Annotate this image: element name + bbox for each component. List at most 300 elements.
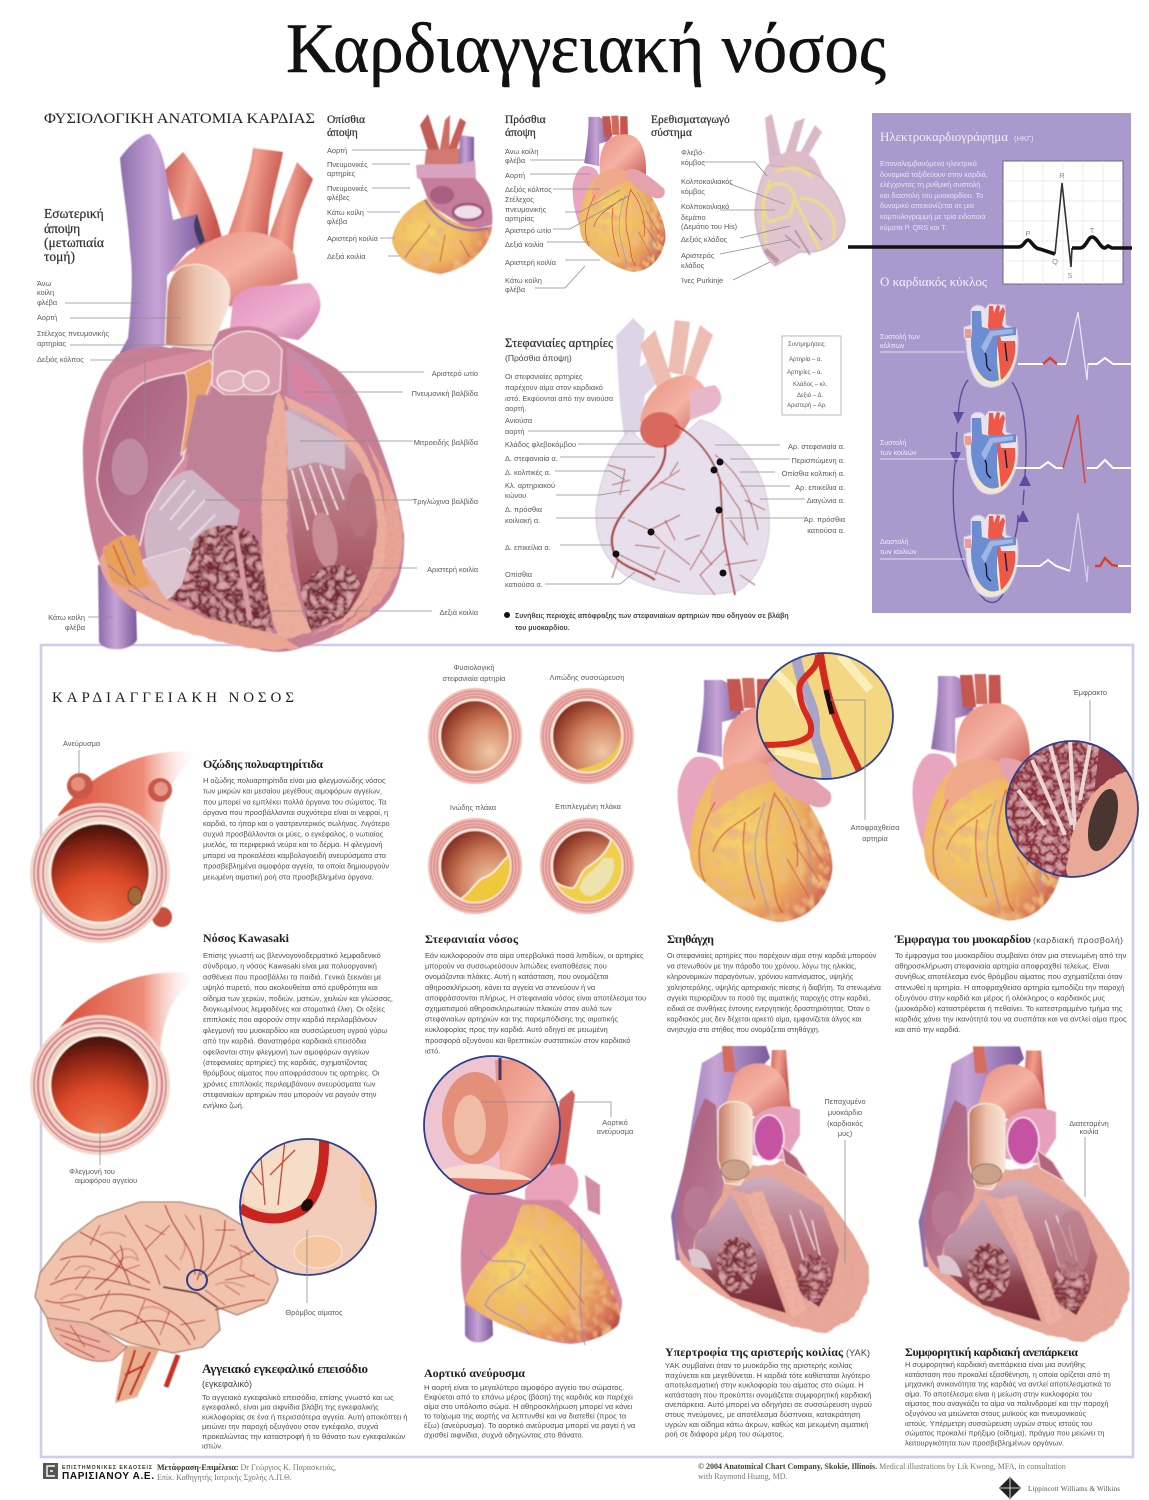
labels: posterior view: Αριστερή κοιλία xyxy=(327,234,379,243)
labels: posterior view: φλέβες xyxy=(327,193,350,202)
labels: conduction system: κόμβος xyxy=(681,187,705,196)
text: polyarteritis nodosa: μειωμένη αιματική ροή στα προσβεβλημένα όργανα. xyxy=(203,872,374,881)
illustration: artery complicated plaque xyxy=(540,818,634,914)
labels: internal view: Αριστερή κοιλία xyxy=(427,565,479,574)
labels: coronary arteries: ιστό. Εκφύονται από την ανιούσα xyxy=(505,394,614,403)
text: Kawasaki disease: στεφανιαίων αρτηριών που μπορούν να ραγούν στην xyxy=(203,1090,377,1099)
text: polyarteritis nodosa: συχνά προσβάλλονται οι μύες, ο εγκέφαλος, ο νωτιαίος xyxy=(203,830,384,838)
labels: internal view: φλέβα xyxy=(37,298,58,307)
labels: internal view: φλέβα xyxy=(65,623,86,632)
text: coronary disease: αθηροσκλήρωση, κάνει τα αγγεία να στενεύουν ή να xyxy=(425,983,596,992)
panel: cardiovascular disease frame xyxy=(41,645,1133,1457)
footnote: του μυοκαρδίου. xyxy=(515,625,570,632)
labels: internal view: Άνω xyxy=(37,279,51,288)
labels: coronary arteries: Διαγώνια α. xyxy=(807,496,845,505)
chart: ECG trace on grid: Q xyxy=(1052,257,1058,266)
text: left ventricular hypertrophy: ανεπάρκεια. Αυτό μπορεί να οδηγήσει σε συσσώρευση υγρού xyxy=(665,1400,872,1409)
labels: artery stages: στεφανιαία αρτηρία xyxy=(443,674,506,683)
text: angina: κληρονομικών παραγόντων, χρόνιου καπνίσματος, υψηλής xyxy=(667,973,854,981)
labels: artery stages xyxy=(443,663,624,812)
text: congestive heart failure: αίμα. Το αποτέλεσμα είναι η μείωση στην κυκλοφορία του xyxy=(905,1389,1092,1398)
labels: internal view: Στέλεχος πνευμονικής xyxy=(37,329,109,338)
labels: anterior view xyxy=(505,147,630,294)
label: aneurysm xyxy=(63,739,101,775)
label: thickened myocardium: μυς) xyxy=(838,1129,852,1138)
labels: anterior view: φλέβα xyxy=(505,156,526,165)
text: Kawasaki disease: θρόμβους αίματος που αποφράσσουν τις αρτηρίες. Οι xyxy=(203,1069,380,1078)
labels: coronary arteries: αορτή. xyxy=(505,404,527,413)
text: stroke: Αγγειακό εγκεφαλικό επεισόδιο xyxy=(202,1361,368,1376)
text: stroke: μειώνει την παροχή οξυγόνου στον εγκέφαλο, συχνά xyxy=(202,1422,379,1431)
legend: abbreviations: Δεξιά – Δ. xyxy=(797,392,824,399)
labels: anterior view: Αορτή xyxy=(505,171,525,180)
labels: coronary arteries: Δ. επικείλια α. xyxy=(505,543,551,552)
text: left ventricular hypertrophy: Υπερτροφία της αριστερής κοιλίας xyxy=(665,1345,844,1359)
labels: coronary arteries: παρέχουν αίμα στον καρδιακό xyxy=(505,383,603,392)
text: angina: καρδιακός μυς δεν δέχεται αρκετό αίμα, εμφανίζεται άλγος και xyxy=(667,1016,862,1024)
text: ECG description: κύματα P, QRS και T. xyxy=(880,223,947,232)
illustration: thrombus magnifier xyxy=(240,1135,384,1275)
text: angina: Οι στεφανιαίες αρτηρίες που παρέχουν αίμα στην καρδιά μπορούν xyxy=(667,952,877,960)
panel: normal heart anatomy heading: ΦΥΣΙΟΛΟΓΙΚΗ ΑΝΑΤΟΜΙΑ ΚΑΡΔΙΑΣ xyxy=(44,111,315,127)
labels: cycle stages xyxy=(880,334,965,559)
labels: coronary arteries: Δ. πρόσθια xyxy=(505,505,543,514)
labels: conduction system xyxy=(680,148,790,285)
credits: translation: Επίκ. Καθηγητής Ιατρικής Σχολής Α.Π.Θ. xyxy=(157,1473,292,1482)
text: ECG description: δυναμικό απεικονίζεται σε μια xyxy=(880,201,974,210)
illustration: artery fatty buildup xyxy=(540,688,634,784)
labels: internal view: Μιτροειδής βαλβίδα xyxy=(414,438,479,447)
icon: ventricular systole heart xyxy=(964,411,1018,494)
text: myocardial infarction: καρδιάς χάνει την ικανότητά του να συσπάται και να αντλεί αίμα προς xyxy=(895,1015,1127,1024)
label: thickened myocardium: μυοκάρδιο xyxy=(828,1108,862,1117)
chart: ECG trace on grid xyxy=(848,161,1132,284)
labels: coronary arteries: Αρ. πρόσθια xyxy=(804,515,846,524)
text: coronary disease: προσφορά οξυγόνου και θρεπτικών συστατικών στον καρδιακό xyxy=(425,1036,631,1045)
panel: ECG and cardiac cycle xyxy=(848,113,1132,613)
panel: anterior view xyxy=(505,114,665,294)
label: aortic aneurysm xyxy=(481,1102,634,1136)
text: angina: ειδικά σε συνθήκες έντονης ενεργητικής δραστηριότητας. Όταν ο xyxy=(667,1005,870,1013)
labels: cycle stages: Διαστολή xyxy=(880,539,909,546)
chart: ECG trace on grid: S xyxy=(1067,271,1073,280)
panel: anterior view: άποψη xyxy=(505,127,536,139)
illustration: artery fibrous plaque xyxy=(428,818,522,914)
text: ECG description: ελέγχοντας τη ρυθμική συστολή xyxy=(880,180,980,189)
text: coronary disease: αποφράσσονται πλήρως. Η στεφανιαία νόσος είναι αποτέλεσμα του xyxy=(425,993,646,1002)
label: infarct xyxy=(1072,688,1107,741)
title: Καρδιαγγειακή νόσος xyxy=(286,10,886,88)
labels: coronary arteries: Περισπώμενη α. xyxy=(791,456,845,465)
illustration: infarction heart xyxy=(913,674,1061,920)
panel: anterior view: Πρόσθια xyxy=(505,114,546,126)
illustration: coronary heart xyxy=(596,318,769,595)
illustration: main cutaway heart xyxy=(83,134,404,652)
text: ECG description: Επαναλαμβανόμενα ηλεκτρικά xyxy=(880,159,977,168)
text: coronary disease: στεφανιαίων αρτηριών και της παρεμπόδισης της αιματικής xyxy=(425,1015,618,1024)
text: polyarteritis nodosa: Οζώδης πολυαρτηρίτιδα xyxy=(203,757,323,771)
labels: anterior view: Άνω κοίλη xyxy=(505,147,538,156)
labels: internal view: τομή) xyxy=(44,249,75,264)
text: congestive heart failure: Συμφορητική καρδιακή ανεπάρκεια xyxy=(905,1345,1078,1359)
labels: artery stages: Λιπώδης συσσώρευση xyxy=(550,673,624,682)
illustration: conduction heart xyxy=(755,114,845,266)
labels: internal view: αρτηρίας xyxy=(37,339,67,348)
text: Kawasaki disease: από την καρδιά. Θανατηφόρα καρδιακά επεισόδια xyxy=(203,1037,367,1046)
text: Kawasaki disease: χρόνιες επιπλοκές περιλαμβάνουν ανευρύσματα των xyxy=(203,1079,376,1088)
heading: ECG: Ηλεκτροκαρδιογράφημα xyxy=(880,129,1008,144)
illustration: artery normal xyxy=(428,688,522,784)
legend: abbreviations: Αρτηρία – α. xyxy=(789,357,822,363)
text: myocardial infarction: συνήθως αποτέλεσμα ενός θρόμβου αίματος που σχηματίζεται όταν xyxy=(895,972,1123,981)
labels: coronary arteries: Κλ. αρτηριακού xyxy=(505,481,555,490)
panel: conduction system xyxy=(651,114,845,285)
labels: artery stages: Φυσιολογική xyxy=(454,663,494,672)
text: Kawasaki disease: οφείλονται στην φλεγμονή των αιμοφόρων αγγείων xyxy=(203,1047,370,1056)
illustration: angina heart xyxy=(678,678,832,922)
labels: anterior view: Δεξιά κοιλία xyxy=(505,240,544,249)
labels: anterior view: Στέλεχος xyxy=(505,195,534,204)
text: myocardial infarction xyxy=(894,932,1127,1034)
labels: posterior view: Πνευμονικές xyxy=(327,160,368,169)
label: aortic aneurysm: Αορτικό xyxy=(602,1118,628,1127)
illustration: left ventricular hypertrophy heart xyxy=(671,1046,869,1333)
text: left ventricular hypertrophy: ΥΑΚ συμβαίνει όταν το μυοκάρδιο της αριστερής κοιλίας xyxy=(665,1361,853,1370)
logo: Parisianou publisher xyxy=(43,1463,154,1482)
text: left ventricular hypertrophy: στους πνεύμονες, με αποτέλεσμα δύσπνοια, κατακράτηση xyxy=(665,1410,860,1419)
labels: coronary arteries: Δ. στεφανιαία α. xyxy=(505,454,558,463)
text: stroke: κυκλοφορίας σε ένα ή περισσότερα αγγεία. Αυτή αποκόπτει ή xyxy=(202,1412,408,1421)
text: angina xyxy=(667,932,881,1034)
labels: coronary arteries: Ανιούσα xyxy=(505,416,533,425)
labels: posterior view: Πνευμονικές xyxy=(327,184,368,193)
text: stroke: προκαλώντας την καταστροφή ή το θάνατο των εγκεφαλικών xyxy=(202,1432,405,1441)
labels: posterior view: φλέβα xyxy=(327,217,348,226)
heading: cardiac cycle: Ο καρδιακός κύκλος xyxy=(880,274,988,289)
illustration: blocked artery magnifier xyxy=(755,650,893,785)
chart: mini ECG atrial systole xyxy=(1018,312,1131,380)
text: left ventricular hypertrophy xyxy=(665,1345,872,1439)
text: left ventricular hypertrophy: αποτελεσματική στην κυκλοφορία του αίματος στο σώμα. Η xyxy=(665,1381,864,1390)
text: myocardial infarction: Έμφραγμα του μυοκαρδίου xyxy=(894,932,1031,946)
label: blocked artery: Αποφραχθείσα xyxy=(850,823,900,832)
text: congestive heart failure: αίματος που αναγκάζει το αίμα να παλινδρομεί και την παροχή xyxy=(905,1399,1108,1408)
label: thickened myocardium: (καρδιακός xyxy=(827,1119,863,1128)
credits: copyright: with Raymond Huang, MD. xyxy=(698,1472,788,1481)
labels: posterior view: αρτηρίες xyxy=(327,169,356,178)
label: dilated ventricle: Διατεταμένη xyxy=(1069,1119,1109,1128)
labels: anterior view: αρτηρίας xyxy=(505,214,535,223)
text: angina: χοληστερόλης, υψηλής αρτηριακής πίεσης ή διαβήτη. Τα στενωμένα xyxy=(667,984,881,992)
labels: cycle stages: κόλπων xyxy=(880,342,905,350)
heading: cardiovascular disease: ΚΑΡΔΙΑΓΓΕΙΑΚΗ ΝΟΣΟΣ xyxy=(52,690,294,706)
text: Kawasaki disease: (στεφανιαίες αρτηρίες) της καρδιάς, σχηματίζοντας xyxy=(203,1058,368,1067)
labels: coronary arteries: κώνου xyxy=(505,491,526,500)
text: stroke: εγκεφαλικό, είναι μια αιφνίδια βλάβη της εγκεφαλικής xyxy=(202,1403,379,1412)
labels: coronary arteries: κοιλιακή α. xyxy=(505,516,540,525)
logo: Lippincott Williams & Wilkins xyxy=(999,1477,1120,1499)
labels: conduction system: κλάδος xyxy=(681,261,705,270)
label: vessel inflammation: Φλεγμονή του xyxy=(69,1167,115,1176)
text: myocardial infarction: (μυοκάρδιο) καταστρέφεται ή πεθαίνει. Το κατεστραμμένο τμήμα της xyxy=(895,1004,1123,1013)
text: myocardial infarction: και από την καρδιά. xyxy=(895,1025,961,1034)
labels: internal view: Κάτω κοίλη xyxy=(48,613,85,622)
labels: coronary arteries: Οι στεφανιαίες αρτηρίες xyxy=(505,372,583,381)
labels: artery stages: Ινώδης πλάκα xyxy=(450,803,497,812)
text: Kawasaki disease: επιπλοκές που αφορούν στην καρδιά περιλαμβάνουν xyxy=(203,1015,377,1024)
text: congestive heart failure: Η συμφορητική καρδιακή ανεπάρκεια είναι μια συνήθης xyxy=(905,1360,1086,1369)
text: Kawasaki disease: ενήλικο ζωή. xyxy=(203,1101,244,1110)
label: vessel inflammation: αιμοφόρου αγγείου xyxy=(75,1176,137,1185)
text: aortic aneurysm: Αορτικό ανεύρυσμα xyxy=(424,1366,525,1380)
illustration: infarct magnifier xyxy=(1006,740,1140,880)
text: ECG description: καμπυλογραμμή με τρία ειδοποιά xyxy=(880,212,986,221)
text: stroke: Το αγγειακό εγκεφαλικό επεισόδιο, επίσης γνωστό και ως xyxy=(202,1393,394,1402)
legend: abbreviations xyxy=(782,336,841,415)
text: polyarteritis nodosa: των μικρών και μεσαίου μεγέθους αιμοφόρων αγγείων, xyxy=(203,787,382,796)
labels: internal view: Τριγλώχινα βαλβίδα xyxy=(413,497,479,506)
text: ECG description: δυναμικά ταξιδεύουν στην καρδιά, xyxy=(880,170,988,179)
text: congestive heart failure: κατάσταση που προκαλεί εξασθένηση, η οποία ορίζεται από τη xyxy=(905,1370,1110,1379)
panel: ECG and cardiac cycle: (ΗΚΓ) xyxy=(1014,134,1034,143)
illustration: aneurysm magnifier xyxy=(424,1056,565,1200)
labels: posterior view: Δεξιά κοιλία xyxy=(327,252,366,261)
icon: atrial systole heart xyxy=(964,304,1018,387)
labels: artery stages: Επιπλεγμένη πλάκα xyxy=(555,802,622,811)
panel: posterior view: άποψη xyxy=(327,127,358,139)
labels: conduction system: Δεξιός κλάδος xyxy=(681,235,728,244)
icon: brain highlight circle xyxy=(187,1270,207,1290)
labels: cycle stages: Συστολή xyxy=(880,440,906,447)
labels: coronary arteries: κατιούσα α. xyxy=(505,580,543,589)
text: polyarteritis nodosa: καρδιά, το ήπαρ και ο γαστρεντερικός σωλήνας. Λιγότερο xyxy=(203,819,390,828)
text: coronary disease: μπορούν να συσσωρεύσουν λιπώδεις εναποθέσεις που xyxy=(425,962,607,971)
text: stroke: ιστών. xyxy=(202,1442,223,1450)
illustration: posterior heart xyxy=(392,114,492,274)
blockage dots xyxy=(612,458,726,576)
text: aortic aneurysm: σχισθεί αιφνίδια, συχνά οδηγώντας στο θάνατο. xyxy=(424,1430,584,1440)
text: polyarteritis nodosa: που μπορεί να εμπλέκει πολλά όργανα του σώματος. Τα xyxy=(203,797,387,806)
labels: internal view: (μετωπιαία xyxy=(44,235,104,250)
text: congestive heart failure xyxy=(905,1345,1111,1447)
text: angina: αγγεία περιορίζουν το ποσό της αιματικής παροχής στην καρδιά, xyxy=(667,994,870,1002)
labels: posterior view xyxy=(327,146,430,261)
text: aortic aneurysm: το τοίχωμα της αορτής να λεπτυνθεί και να διατεθεί (προς τα xyxy=(424,1412,627,1420)
labels: anterior view: πνευμονικής xyxy=(505,205,547,214)
text: polyarteritis nodosa: Η οζώδης πολυαρτηρίτιδα είναι μια φλεγμονώδης νόσος xyxy=(203,776,386,785)
illustration: stroke brain xyxy=(35,1202,278,1403)
legend: abbreviations: Αρτηρίες – α. xyxy=(787,370,822,376)
text: left ventricular hypertrophy: παχύνεται και μεγεθύνεται. Η καρδιά τότε καθίσταται λιγότερο xyxy=(665,1371,870,1380)
chart: ECG trace on grid: R xyxy=(1059,171,1065,180)
text: polyarteritis nodosa: μπορεί να προκαλέσει καμβολογοειδή ανευρύσματα στα xyxy=(203,851,387,860)
chart: mini ECG ventricular systole xyxy=(1015,415,1131,483)
text: Kawasaki disease: Νόσος Kawasaki xyxy=(203,931,290,945)
text: coronary disease xyxy=(425,932,646,1055)
labels: anterior view: φλέβα xyxy=(505,285,526,294)
label: thickened myocardium xyxy=(824,1097,866,1263)
labels: conduction system: (Δεμάτιο του His) xyxy=(681,222,737,231)
logo: Parisianou publisher: ΕΠΙΣΤΗΜΟΝΙΚΕΣ ΕΚΔΟΣΕΙΣ xyxy=(62,1465,152,1471)
footnote: Συνήθεις περιοχές απόφραξης των στεφανιαίων αρτηριών που οδηγούν σε βλάβη xyxy=(515,612,789,620)
text: myocardial infarction: αθηροσκλήρωση στεφανιαία αρτηρία αποφραχθεί τελείως. Είναι xyxy=(895,962,1110,971)
labels: cycle stages: των κοιλιών xyxy=(880,449,917,457)
labels: internal view: άποψη xyxy=(44,221,80,236)
labels: coronary arteries: Κλάδος φλεβοκόμβου xyxy=(505,440,576,449)
text: Kawasaki disease: διογκωμένους λεμφαδένες και στοματικά έλκη. Οι οξείες xyxy=(203,1004,385,1014)
credits: translation: Dr Γεώργιος Κ. Παρασκευάς, xyxy=(239,1463,336,1472)
text: left ventricular hypertrophy: υγρών και οίδημα κάτω άκρων, καθώς και μειωμένη αιματική xyxy=(665,1420,868,1429)
logo: Parisianou publisher: ΠΑΡΙΣΙΑΝΟΥ Α.Ε. xyxy=(62,1471,154,1482)
text: Kawasaki disease: ασθένεια που προσβάλλει τα παιδιά. Γενικά ξεκινάει με xyxy=(203,972,382,981)
text: myocardial infarction: (καρδιακή προσβολή) xyxy=(1033,935,1123,945)
label: infarct: Έμφρακτο xyxy=(1072,688,1107,697)
labels: conduction system: Ίνες Purkinje xyxy=(680,276,723,285)
text: left ventricular hypertrophy: κατάσταση που προκύπτει ονομάζεται συμφορητική καρδιακή xyxy=(665,1390,871,1399)
labels: internal view: Εσωτερική xyxy=(44,206,104,221)
arrows: cycle xyxy=(950,380,1031,602)
labels: anterior view: Αριστερό ωτίο xyxy=(505,226,551,235)
text: polyarteritis nodosa: προσβεβλημένα αιμοφόρα αγγεία, τα οποία δημιουργούν xyxy=(203,862,389,871)
panel: coronary arteries xyxy=(504,318,846,632)
chart: ECG trace on grid: T xyxy=(1090,226,1095,235)
label: dilated ventricle: κοιλία xyxy=(1080,1127,1099,1136)
text: left ventricular hypertrophy: ροή σε διάφορα μέρη του σώματος. xyxy=(665,1430,784,1439)
text: myocardial infarction: στενωθεί η αρτηρία. Η αποφραχθείσα αρτηρία εμποδίζει την παροχή xyxy=(895,983,1125,992)
labels: coronary arteries: κατιούσα α. xyxy=(807,526,845,535)
labels: coronary arteries: Οπίσθια xyxy=(505,570,533,579)
text: coronary disease: κυκλοφορίας προς την καρδιά. Αυτό οδηγεί σε μειωμένη xyxy=(425,1025,608,1034)
legend: abbreviations: Αριστερή – Αρ. xyxy=(787,402,827,409)
labels: conduction system: Κολποκοιλιακό xyxy=(681,202,729,211)
labels: internal view xyxy=(37,206,479,632)
text: congestive heart failure: μηχανική ανικανότητα της καρδιάς να αντλεί αποτελεσματικά το xyxy=(905,1380,1111,1389)
text: aortic aneurysm: Εκφύεται από το επάνω μέρος (βάση) της καρδιάς και παρέχει xyxy=(424,1392,633,1402)
labels: posterior view: Αορτή xyxy=(327,146,347,155)
labels: internal view: Αορτή xyxy=(37,313,57,322)
labels: internal view: κοίλη xyxy=(37,288,54,297)
text: aortic aneurysm: Η αορτή είναι το μεγαλύτερο αιμοφόρο αγγείο του σώματος. xyxy=(424,1383,624,1392)
labels: posterior view: Κάτω κοίλη xyxy=(327,208,364,217)
illustration: congestive heart failure heart xyxy=(919,1046,1130,1342)
text: angina: ανησυχία στο στήθος που ονομάζεται στηθάγχη. xyxy=(667,1026,820,1034)
labels: coronary arteries: Οπίσθια κολπική α. xyxy=(782,469,845,478)
panel: conduction system: σύστημα xyxy=(651,127,692,139)
labels: internal view: Αριστερό ωτίο xyxy=(432,369,478,378)
label: blocked artery xyxy=(830,700,900,843)
text: stroke: (εγκεφαλικό) xyxy=(202,1379,252,1389)
text: angina: να στενωθούν με την πάροδο του χρόνου, λόγω της ηλικίας, xyxy=(667,963,857,971)
illustration: polyarteritis nodosa vessel xyxy=(30,752,200,943)
labels: conduction system: Φλεβό- xyxy=(681,148,705,157)
labels: conduction system: κόμβος xyxy=(681,158,705,167)
label: dilated ventricle xyxy=(1069,1119,1109,1197)
labels: anterior view: Κάτω κοίλη xyxy=(505,276,542,285)
text: coronary disease: ονομάζονται πλάκες. Αυτή η κατάσταση, που ονομάζεται xyxy=(425,972,609,981)
panel: coronary arteries: Στεφανιαίες αρτηρίες xyxy=(505,336,613,350)
text: coronary disease: ιστό. xyxy=(425,1046,440,1055)
label: thrombus xyxy=(285,1230,343,1317)
text: congestive heart failure: οξυγόνου να μειώνεται στους μυϊκούς και πνευμονικούς xyxy=(905,1409,1087,1418)
text: myocardial infarction: Το έμφραγμα του μυοκαρδίου συμβαίνει όταν μια στενωμένη από την xyxy=(895,951,1127,960)
labels: coronary arteries: αορτή xyxy=(505,427,525,436)
credits: copyright: Medical illustrations by Lik Kwong, MFA, in consultation xyxy=(877,1462,1066,1471)
labels: coronary arteries: Αρ. επικείλια α. xyxy=(795,483,845,492)
text: aortic aneurysm xyxy=(424,1366,636,1440)
text: Kawasaki disease xyxy=(203,931,393,1110)
illustration: aortic aneurysm heart xyxy=(461,1090,622,1345)
text: stroke xyxy=(202,1361,408,1450)
logo: Lippincott Williams & Wilkins: Lippincott Williams & Wilkins xyxy=(1028,1485,1120,1493)
credits: copyright: © 2004 Anatomical Chart Company, Skokie, Illinois. xyxy=(698,1462,877,1471)
illustration: anterior heart xyxy=(573,116,665,272)
chart: mini ECG ventricular diastole xyxy=(1015,513,1131,582)
panel: coronary arteries: (Πρόσθια άποψη) xyxy=(505,353,572,363)
text: Kawasaki disease: οίδημα των χεριών, ποδιών, ματιών, χειλιών και γλώσσας, xyxy=(203,994,393,1003)
labels: coronary arteries xyxy=(505,372,846,589)
chart: ECG trace on grid: P xyxy=(1025,229,1031,238)
label: thrombus: Θρόμβος αίματος xyxy=(285,1308,343,1317)
text: ECG description: και διαστολή του μυοκαρδίου. Το xyxy=(880,191,983,200)
labels: conduction system: Κολποκοιλιακός xyxy=(681,177,733,186)
panel: posterior view: Οπίσθια xyxy=(327,114,365,126)
text: congestive heart failure: ιστούς. Υπέρμετρη συσσώρευση υγρών στους ιστούς του xyxy=(905,1419,1092,1428)
icon: ventricular diastole heart xyxy=(964,514,1018,597)
label: aneurysm: Ανεύρυσμα xyxy=(63,739,101,748)
text: Kawasaki disease: Επίσης γνωστή ως βλεννογονοδερματικό λεμφαδενικό xyxy=(203,951,381,960)
labels: conduction system: δεμάτιο xyxy=(681,213,706,222)
label: blocked artery: αρτηρία xyxy=(862,834,888,843)
illustration: Kawasaki vessel xyxy=(30,972,200,1155)
text: angina: Στηθάγχη xyxy=(667,932,714,946)
label: thickened myocardium: Πεπαχυμένο xyxy=(824,1097,866,1106)
text: Kawasaki disease: σύνδρομο, η νόσος Kawasaki είναι μια πολυοργανική xyxy=(203,962,377,971)
panel: conduction system: Ερεθισματαγωγό xyxy=(651,114,730,126)
label: vessel inflammation xyxy=(69,1120,137,1185)
text: coronary disease: Στεφανιαία νόσος xyxy=(425,932,519,946)
text: polyarteritis nodosa: μυελός, τα περιφερικά νεύρα και το δέρμα. Η φλεγμονή xyxy=(203,840,382,849)
legend: abbreviations: Κλάδος – κλ. xyxy=(793,381,828,388)
labels: internal view: Δεξιός κόλπος xyxy=(37,355,84,364)
text: polyarteritis nodosa: όργανα που προσβάλλονται συχνότερα είναι οι νεφροί, η xyxy=(203,808,388,817)
text: Kawasaki disease: υψηλό πυρετό, που ακολουθείται από ερυθρότητα και xyxy=(203,983,378,992)
label: aortic aneurysm: ανεύρυσμα xyxy=(597,1127,634,1136)
labels: cycle stages: των κοιλιών xyxy=(880,548,917,556)
legend: abbreviations: Συντμημήσεις: xyxy=(788,341,827,348)
labels: anterior view: Δεξιός κόλπος xyxy=(505,185,552,194)
labels: anterior view: Αριστερή κοιλία xyxy=(505,258,557,267)
footnote xyxy=(504,612,789,632)
text: myocardial infarction: οξυγόνου στην καρδιά και μέρος ή ολόκληρος ο καρδιακός μυς xyxy=(895,993,1105,1002)
labels: coronary arteries: Αρ. στεφανιαία α. xyxy=(788,442,845,451)
text: aortic aneurysm: αίμα στο υπόλοιπο σώμα. Η αθηροσκλήρωση μπορεί να κάνει xyxy=(424,1402,633,1411)
labels: internal view: Πνευμονική βαλβίδα xyxy=(412,389,479,398)
text: Kawasaki disease: φλεγμονή του μυοκαρδίου και συσσώρευση υγρού γύρω xyxy=(203,1026,387,1035)
labels: coronary arteries: Δ. κολπικές α. xyxy=(505,468,551,477)
text: coronary disease: σχηματισμού αθηροσκληρωτικών πλακών στον αυλό των xyxy=(425,1004,612,1013)
text: coronary disease: Εάν κυκλοφορούν στο αίμα υπερβολικά ποσά λιπιδίων, οι αρτηρίες xyxy=(425,951,644,960)
text: congestive heart failure: σώματος προκαλεί πρήξιμο (οίδημα), πράγμα που μειώνει τη xyxy=(905,1429,1104,1438)
text: polyarteritis nodosa xyxy=(203,757,390,881)
panel: posterior view xyxy=(327,114,492,274)
text: left ventricular hypertrophy: (ΥΑΚ) xyxy=(846,1348,870,1358)
labels: cycle stages: Συστολή των xyxy=(880,334,920,341)
text: aortic aneurysm: έξω) (ανεύρυσμα). Το αορτικό ανεύρυσμα μπορεί να ραγεί ή να xyxy=(424,1421,636,1430)
credits: translation: Μετάφραση-Επιμέλεια: xyxy=(157,1463,239,1472)
text: congestive heart failure: λειτουργικότητα των προσβεβλημένων οργάνων. xyxy=(905,1438,1064,1447)
labels: conduction system: Αριστερός xyxy=(681,251,715,260)
labels: internal view: Δεξιά κοιλία xyxy=(440,608,479,617)
